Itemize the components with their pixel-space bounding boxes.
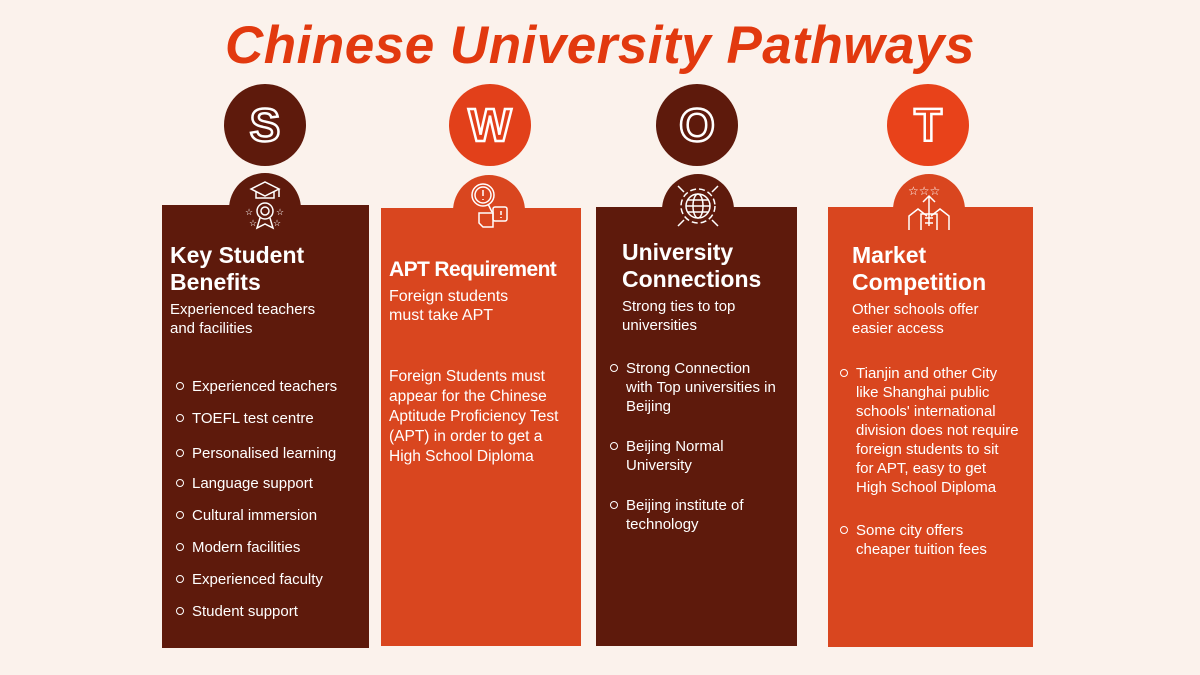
bullets T: Some city offers cheaper tuition fees (856, 522, 987, 558)
body W: Foreign Students must appear for the Chinese Aptitude Proficiency Test (APT) in order to get a High School Diploma (389, 368, 558, 465)
heading T: Competition (852, 269, 986, 295)
bullets S: Student support (192, 603, 298, 620)
panel: T market competition (828, 207, 1033, 647)
icon tab: graduation: ☆ (276, 207, 284, 217)
subtitle T: Other schools offer (852, 301, 978, 318)
bullets S: Personalised learning (192, 445, 336, 462)
icon tab: stars growth (893, 174, 965, 214)
letter circle T (887, 84, 969, 166)
heading W: APT Requirement (389, 258, 556, 281)
subtitle W: must take APT (389, 307, 493, 324)
subtitle S: Experienced teachers (170, 301, 315, 318)
bullets S: Language support (192, 475, 313, 492)
letter circle O (656, 84, 738, 166)
icon tab: graduation: ☆ (245, 207, 253, 217)
bullets S: Modern facilities (192, 539, 300, 556)
subtitle W (389, 288, 508, 324)
letter circle W (449, 84, 531, 166)
bullets S: Experienced teachers (192, 378, 337, 395)
bullets S (176, 378, 337, 620)
subtitle S (170, 301, 315, 337)
subtitle S: and facilities (170, 320, 253, 337)
icon tab: graduation (229, 173, 301, 213)
bullets T (840, 365, 1019, 558)
bullets O: Beijing Normal University (626, 438, 724, 474)
bullets S: Cultural immersion (192, 507, 317, 524)
heading T (852, 242, 986, 295)
heading O: Connections (622, 266, 761, 292)
bullets O: Beijing institute of technology (626, 497, 744, 533)
subtitle W: Foreign students (389, 288, 508, 305)
bullets S: TOEFL test centre (192, 410, 314, 427)
icon tab: stars growth: ☆☆☆ (908, 184, 940, 198)
heading S: Key Student (170, 242, 304, 268)
panel: O university connections (596, 207, 797, 646)
subtitle O: Strong ties to top (622, 298, 735, 315)
bullets O (610, 360, 776, 533)
heading S: Benefits (170, 269, 261, 295)
text: ☆ (249, 218, 257, 228)
icon tab: globe (662, 174, 734, 214)
title: Chinese University Pathways (225, 16, 975, 75)
subtitle O: universities (622, 317, 697, 334)
heading O: University (622, 239, 733, 265)
text: ☆ (273, 218, 281, 228)
bullets T: Tianjin and other City like Shanghai public schools' international division does not require foreign students to sit for APT, easy to get High School Diploma (856, 365, 1019, 496)
bullets O: Strong Connection with Top universities in Beijing (626, 360, 776, 415)
subtitle T: easier access (852, 320, 944, 337)
subtitle T (852, 301, 978, 337)
letter circle S (224, 84, 306, 166)
heading T: Market (852, 242, 926, 268)
panel: W APT requirement (381, 208, 581, 646)
bullets S: Experienced faculty (192, 571, 323, 588)
heading O (622, 239, 761, 292)
icon tab: magnifier (453, 175, 525, 215)
heading S (170, 242, 304, 295)
subtitle O (622, 298, 735, 334)
panel: S key student benefits (162, 205, 369, 648)
